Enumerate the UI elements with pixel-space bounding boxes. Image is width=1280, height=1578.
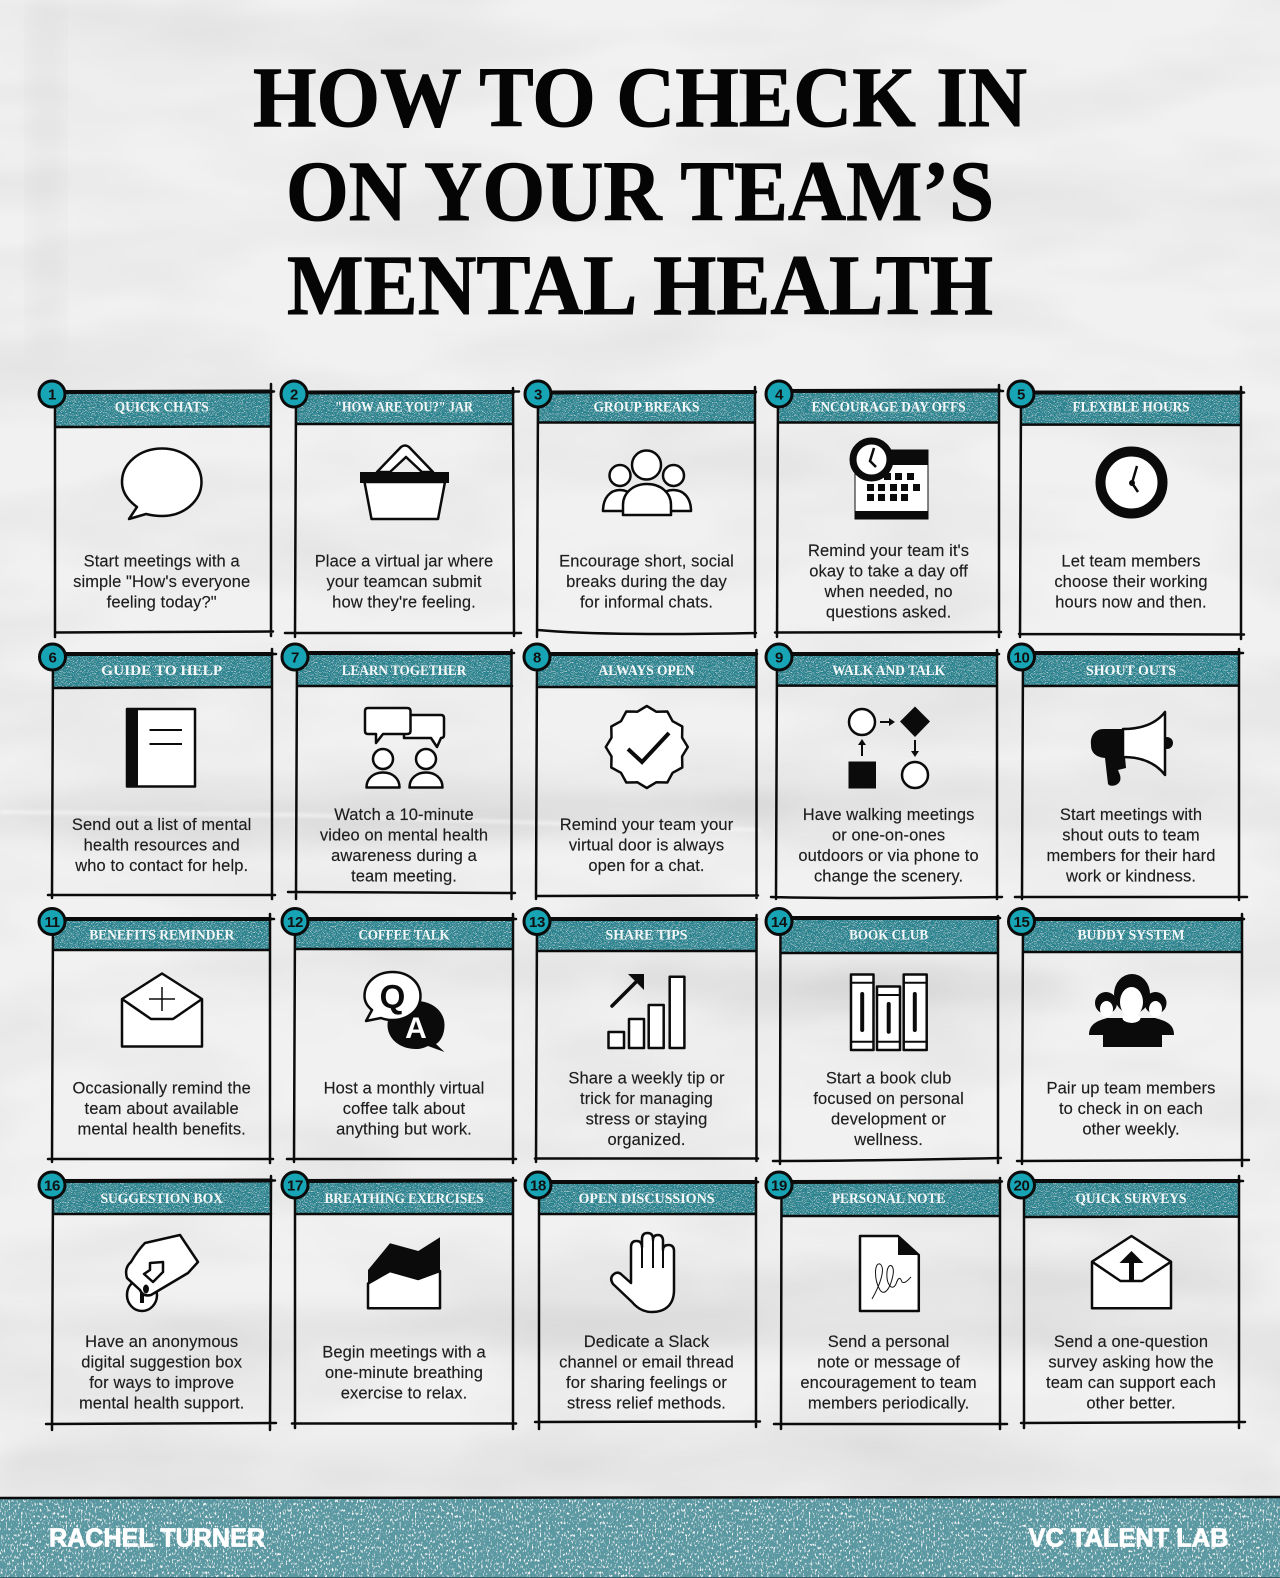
card 18: open discussions [525, 1172, 760, 1429]
description: your teamcan submit [326, 573, 482, 591]
header band [537, 654, 756, 687]
card 10: shout outs [1008, 644, 1247, 900]
card 5: flexible hours [1008, 381, 1244, 639]
number badge: 11 [44, 914, 60, 931]
description: simple "How's everyone [73, 573, 250, 591]
number badge [525, 381, 551, 407]
footer left name: RACHEL TURNER [49, 1522, 265, 1552]
number badge [766, 908, 792, 934]
header band [295, 1181, 513, 1214]
icon: books [851, 974, 927, 1050]
card 14: book club [766, 908, 1001, 1164]
description: Send out a list of mental [72, 816, 251, 834]
number badge: 20 [1014, 1178, 1029, 1194]
card 16: suggestion box [39, 1172, 276, 1430]
card frame [774, 1178, 1007, 1429]
header band [1021, 392, 1241, 424]
description: survey asking how the [1048, 1354, 1214, 1372]
number badge: 8 [533, 650, 541, 666]
description: mental health support. [79, 1394, 244, 1412]
card frame [535, 915, 758, 1162]
number badge: 14 [771, 914, 788, 931]
card frame [773, 916, 1001, 1164]
heading: "HOW ARE YOU?" JAR [335, 400, 473, 416]
description: Watch a 10-minute [334, 806, 474, 824]
icon: two people talking [365, 708, 444, 788]
number badge: 12 [287, 914, 303, 931]
description: Pair up team members [1047, 1080, 1215, 1098]
heading: SHOUT OUTS [1086, 663, 1176, 679]
number badge [281, 381, 307, 407]
number badge [282, 908, 308, 934]
card frame [771, 650, 1002, 899]
icon: megaphone [1091, 712, 1173, 786]
card frame [288, 650, 515, 899]
card 3: group breaks [525, 381, 756, 637]
description: or one-on-ones [832, 826, 945, 844]
icon: flow diagram [848, 706, 930, 788]
icon: envelope with arrow [1092, 1236, 1171, 1308]
number badge: 9 [775, 650, 783, 666]
heading: BREATHING EXERCISES [324, 1191, 484, 1207]
description: other better. [1086, 1394, 1176, 1412]
card 15: buddy system [1008, 908, 1249, 1166]
card 19: personal note [766, 1172, 1007, 1429]
description: health resources and [84, 836, 240, 854]
number badge: 6 [49, 650, 57, 666]
description: coffee talk about [343, 1100, 466, 1118]
card frame [287, 914, 516, 1163]
header band [297, 653, 512, 686]
card frame [48, 914, 274, 1163]
number badge: 19 [771, 1178, 787, 1194]
number badge: 2 [290, 386, 298, 404]
icon: check badge [606, 706, 688, 788]
description: encouragement to team [800, 1374, 977, 1392]
heading: LEARN TOGETHER [342, 663, 466, 679]
header band [777, 654, 996, 686]
number badge: 4 [775, 386, 784, 404]
icon: clock [1100, 452, 1162, 514]
heading: BOOK CLUB [849, 928, 928, 944]
number badge: 10 [1014, 650, 1029, 666]
card 6: guide to help [40, 644, 276, 899]
header band [538, 392, 754, 422]
icon: rising bar chart [608, 974, 684, 1048]
card frame [535, 1178, 760, 1429]
header band [296, 392, 513, 424]
number badge: 16 [44, 1178, 60, 1194]
description: wellness. [853, 1131, 923, 1149]
heading: PERSONAL NOTE [832, 1191, 945, 1207]
card frame [55, 384, 274, 637]
description: focused on personal [813, 1090, 964, 1108]
description: Remind your team your [560, 816, 734, 834]
number badge [1008, 644, 1034, 670]
heading: FLEXIBLE HOURS [1072, 400, 1190, 416]
header band [537, 919, 756, 951]
number badge [524, 908, 550, 934]
title: ON YOUR TEAM’S [286, 143, 994, 239]
description: Start meetings with a [84, 552, 241, 570]
header band [778, 391, 999, 423]
heading: WALK AND TALK [832, 663, 945, 679]
card 1: quick chats [39, 381, 274, 637]
heading: SUGGESTION BOX [100, 1191, 223, 1207]
number badge: 17 [287, 1178, 303, 1194]
number badge [766, 1172, 792, 1198]
description: channel or email thread [559, 1354, 734, 1372]
heading: OPEN DISCUSSIONS [578, 1191, 714, 1207]
number badge [39, 381, 65, 407]
icon: calendar with clock [853, 441, 928, 519]
description: team about available [85, 1100, 239, 1118]
number badge [766, 381, 792, 407]
description: awareness during a [331, 847, 478, 865]
heading: QUICK CHATS [115, 400, 209, 416]
card frame [1017, 914, 1249, 1166]
description: Occasionally remind the [73, 1080, 251, 1098]
icon: basket [360, 446, 449, 519]
number badge: 15 [1014, 914, 1029, 931]
title: MENTAL HEALTH [287, 237, 993, 333]
icon: envelope with plus [122, 974, 202, 1046]
icon: book [127, 709, 195, 786]
icon: Q and A bubbles: A [405, 1012, 427, 1045]
description: Start a book club [826, 1070, 951, 1088]
card 12: coffee talk [282, 908, 516, 1163]
heading: BUDDY SYSTEM [1078, 928, 1184, 944]
title: HOW TO CHECK IN [253, 49, 1027, 145]
number badge [39, 908, 65, 934]
icon: three people [1089, 974, 1174, 1047]
description: Send a one-question [1054, 1333, 1208, 1351]
icon: group of people [603, 450, 691, 515]
number badge: 7 [291, 650, 299, 666]
description: Have an anonymous [85, 1333, 238, 1351]
card frame [46, 1176, 276, 1430]
description: when needed, no [824, 583, 953, 601]
description: Dedicate a Slack [584, 1333, 710, 1351]
card 11: benefits reminder [39, 908, 274, 1163]
description: Have walking meetings [803, 806, 974, 824]
heading: ALWAYS OPEN [598, 663, 695, 679]
header band [53, 919, 270, 950]
footer right name: VC TALENT LAB [1028, 1522, 1228, 1552]
header band [780, 918, 998, 953]
description: Remind your team it's [808, 542, 969, 560]
header band [782, 1182, 1000, 1216]
icon: hand dropping coin [126, 1235, 198, 1311]
description: Let team members [1061, 552, 1201, 570]
description: choose their working [1054, 573, 1208, 591]
description: change the scenery. [814, 868, 963, 886]
card 13: share tips [524, 908, 758, 1162]
description: video on mental health [320, 826, 488, 844]
heading: GUIDE TO HELP [101, 663, 222, 679]
description: digital suggestion box [81, 1354, 243, 1372]
title [253, 49, 1027, 333]
header band [53, 1181, 271, 1214]
description: exercise to relax. [341, 1384, 467, 1402]
number badge: 5 [1017, 386, 1025, 404]
icon: speech bubble [122, 448, 202, 519]
description: Start meetings with [1060, 806, 1202, 824]
header band [295, 919, 512, 949]
header band [53, 654, 272, 688]
description: Begin meetings with a [322, 1344, 486, 1362]
description: anything but work. [336, 1120, 472, 1138]
description: members for their hard [1046, 847, 1216, 865]
description: for sharing feelings or [566, 1374, 727, 1392]
card frame [1019, 387, 1244, 639]
description: shout outs to team [1062, 826, 1200, 844]
description: trick for managing [580, 1090, 713, 1108]
card 20: quick surveys [1008, 1172, 1245, 1428]
header band [1023, 653, 1239, 686]
description: stress or staying [586, 1110, 707, 1128]
description: for informal chats. [580, 594, 713, 612]
card frame [775, 385, 1003, 637]
icon: Q and A bubbles: Q [380, 978, 405, 1015]
card frame [285, 388, 521, 637]
card 9: walk and talk [766, 644, 1002, 899]
number badge [525, 1172, 551, 1198]
header band [1023, 919, 1242, 952]
heading: COFFEE TALK [358, 928, 450, 944]
description: for ways to improve [89, 1374, 234, 1392]
description: how they're feeling. [332, 594, 476, 612]
card 17: breathing exercises [282, 1172, 516, 1429]
description: questions asked. [826, 604, 951, 622]
card 7: learn together [282, 644, 515, 899]
description: note or message of [817, 1354, 960, 1372]
description: feeling today?" [107, 594, 217, 612]
description: mental health benefits. [78, 1120, 246, 1138]
header band [1024, 1181, 1239, 1217]
description: Encourage short, social [559, 552, 734, 570]
description: outdoors or via phone to [798, 847, 979, 865]
description: team meeting. [351, 868, 457, 886]
description: development or [831, 1110, 947, 1128]
description: stress relief methods. [567, 1394, 726, 1412]
description: who to contact for help. [74, 857, 248, 875]
number badge [282, 1172, 308, 1198]
heading: BENEFITS REMINDER [89, 928, 234, 944]
description: work or kindness. [1065, 868, 1196, 886]
card frame [1021, 1176, 1245, 1428]
icon: open hand [611, 1233, 674, 1312]
heading: SHARE TIPS [606, 928, 688, 944]
description: Share a weekly tip or [568, 1070, 725, 1088]
icon: area chart [368, 1237, 440, 1308]
card frame [537, 387, 756, 637]
description: hours now and then. [1055, 594, 1207, 612]
description: organized. [607, 1131, 686, 1149]
number badge [1008, 381, 1034, 407]
number badge [524, 644, 550, 670]
card 4: encourage day offs [766, 381, 1003, 637]
card frame [48, 649, 276, 899]
number badge: 13 [529, 914, 545, 931]
card frame [292, 1178, 516, 1429]
number badge [39, 1172, 65, 1198]
footer bar [0, 1497, 1280, 1578]
number badge [766, 644, 792, 670]
description: breaks during the day [566, 573, 728, 591]
number badge [1008, 908, 1034, 934]
icon: signed document [860, 1236, 919, 1311]
description: Place a virtual jar where [315, 552, 493, 570]
description: okay to take a day off [809, 562, 968, 580]
description: Host a monthly virtual [324, 1080, 484, 1098]
card frame [1015, 649, 1247, 900]
description: team can support each [1046, 1374, 1216, 1392]
number badge: 3 [534, 386, 542, 404]
description: other weekly. [1082, 1120, 1180, 1138]
description: one-minute breathing [325, 1364, 483, 1382]
description: virtual door is always [569, 836, 724, 854]
card 8: always open [524, 644, 758, 899]
header band [539, 1182, 756, 1214]
number badge: 1 [48, 386, 56, 404]
card 2: how are you jar [281, 381, 521, 637]
heading: ENCOURAGE DAY OFFS [812, 400, 966, 416]
number badge [40, 644, 66, 670]
heading: QUICK SURVEYS [1076, 1191, 1186, 1207]
heading: GROUP BREAKS [594, 400, 700, 416]
header band [55, 392, 271, 427]
description: to check in on each [1059, 1100, 1203, 1118]
number badge [282, 644, 308, 670]
description: members periodically. [808, 1394, 969, 1412]
number badge: 18 [530, 1178, 546, 1194]
icon: Q and A bubbles [364, 972, 444, 1052]
description: Send a personal [828, 1333, 949, 1351]
card frame [536, 650, 758, 899]
number badge [1008, 1172, 1034, 1198]
description: open for a chat. [588, 857, 705, 875]
